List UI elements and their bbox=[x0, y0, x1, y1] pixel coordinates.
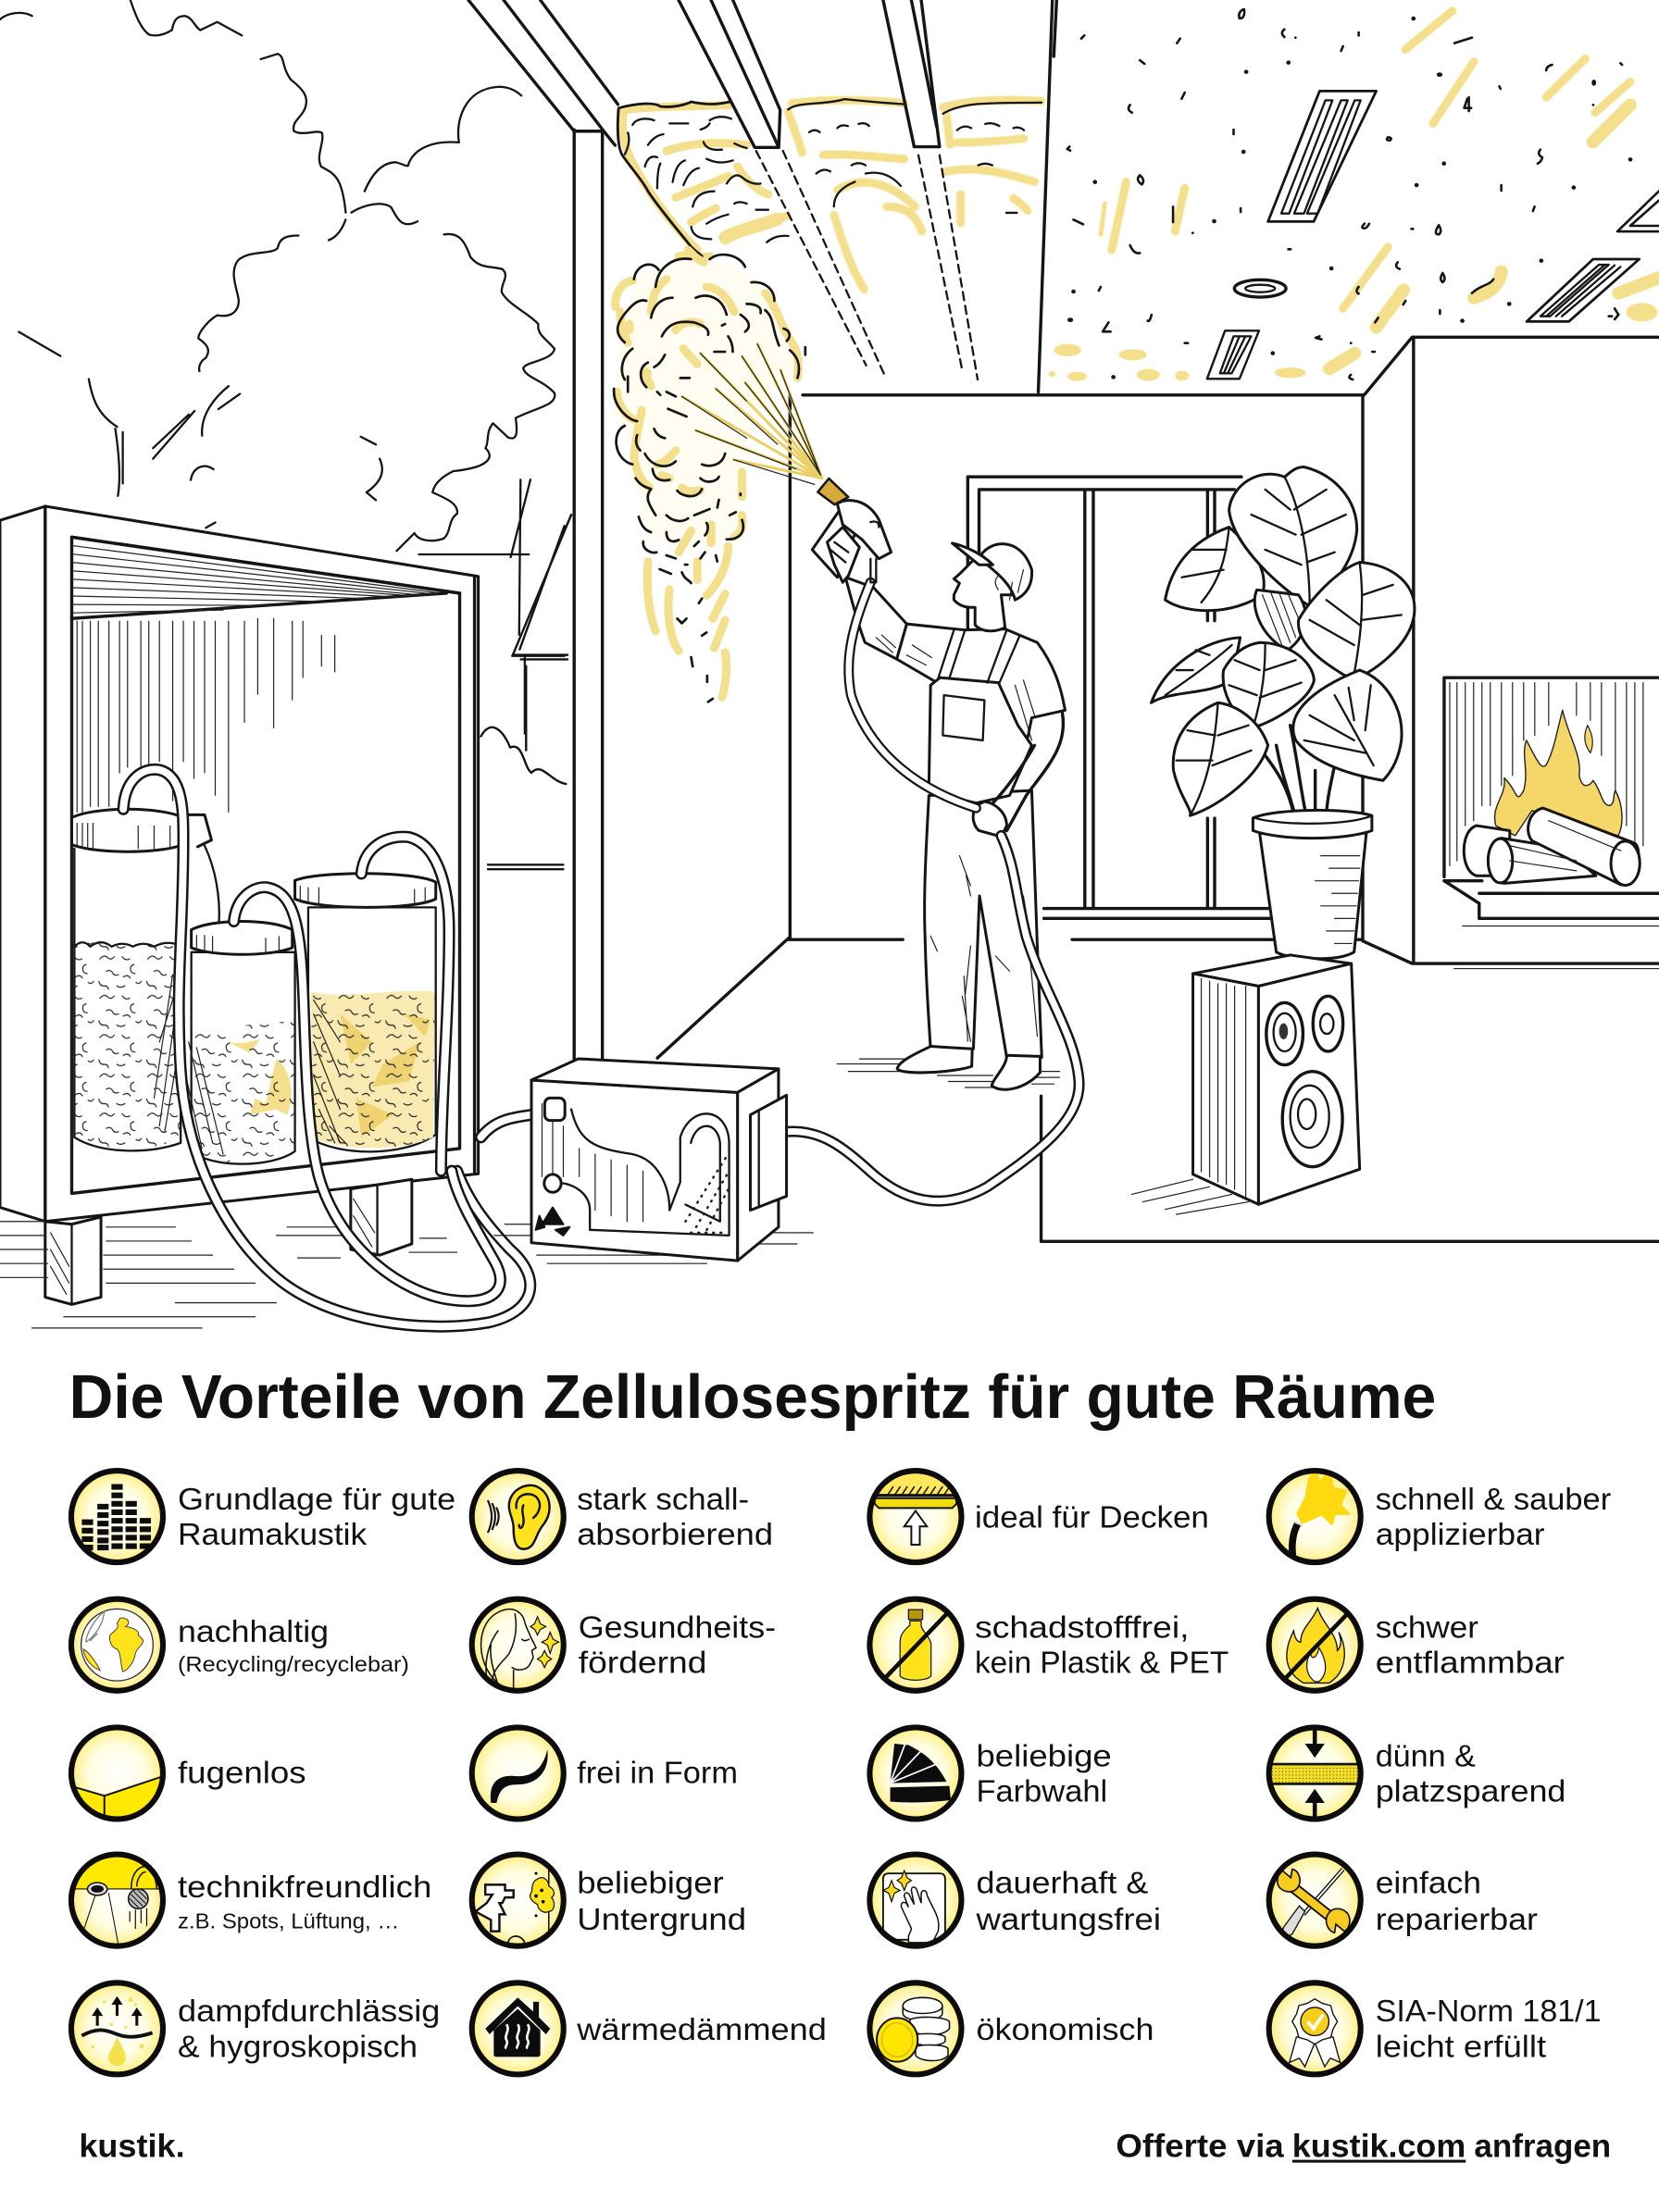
icon: certified medal bbox=[1269, 1982, 1361, 2074]
call to action bbox=[1116, 2129, 1611, 2165]
cabinet legs bbox=[0, 1179, 457, 1328]
brand logo: kustik. bbox=[79, 2129, 185, 2165]
hose bbox=[787, 836, 1079, 1201]
ceiling spotlight bbox=[1234, 280, 1286, 297]
cabinet with cellulose jars, hoses and machine bbox=[0, 506, 813, 1328]
background trees bbox=[0, 0, 555, 554]
jar: yellow cellulose bbox=[295, 874, 436, 1151]
label: reparierbar bbox=[1376, 1903, 1538, 1937]
label: fugenlos bbox=[178, 1757, 306, 1791]
icon: spot and vent bbox=[70, 1854, 164, 1946]
label: SIA-Norm 181/1 bbox=[1376, 1995, 1602, 2029]
benefit: schnell & sauber applizierbar bbox=[1269, 1471, 1611, 1562]
label: stark schall- bbox=[577, 1483, 749, 1517]
label: dampfdurchlässig bbox=[178, 1995, 440, 2029]
label bbox=[178, 1995, 440, 2064]
other foam panels on ceiling bbox=[788, 99, 1042, 290]
label: fördernd bbox=[579, 1647, 706, 1681]
icon: wrench and screwdriver bbox=[1269, 1855, 1361, 1946]
label: dauerhaft & bbox=[976, 1867, 1148, 1901]
label: nachhaltig bbox=[178, 1615, 329, 1649]
spray lines bbox=[682, 344, 822, 478]
icon: globe bbox=[71, 1599, 163, 1691]
ventilation grilles bbox=[1207, 91, 1659, 379]
label: z.B. Spots, Lüftung, … bbox=[178, 1909, 399, 1933]
spray foam cloud and spray jet bbox=[614, 250, 822, 702]
benefit: fugenlos bbox=[70, 1727, 306, 1820]
bib overall bbox=[929, 677, 1031, 803]
label: wartungsfrei bbox=[975, 1903, 1161, 1937]
icon: spray splash bbox=[1269, 1471, 1361, 1562]
blower machine bbox=[494, 1059, 813, 1263]
benefit: beliebige Farbwahl bbox=[869, 1727, 1112, 1820]
foam outline curls bbox=[614, 255, 805, 702]
worker with spray gun and hose bbox=[787, 478, 1079, 1201]
label: ökonomisch bbox=[976, 2013, 1154, 2047]
label: technikfreundlich bbox=[178, 1870, 431, 1905]
label: Farbwahl bbox=[976, 1774, 1107, 1808]
label: leicht erfüllt bbox=[1376, 2030, 1547, 2064]
ceiling beams bbox=[468, 0, 978, 379]
legs bbox=[925, 790, 1042, 1057]
benefit: wärmedämmend bbox=[472, 1982, 827, 2074]
loudspeaker bbox=[1132, 955, 1360, 1214]
label: entflammbar bbox=[1376, 1647, 1565, 1681]
label: & hygroskopisch bbox=[178, 2030, 418, 2064]
benefit: stark schallabsorbierend bbox=[472, 1471, 773, 1562]
label bbox=[976, 1739, 1112, 1808]
lower arm holding hose bbox=[992, 713, 1064, 830]
ceiling edges bbox=[803, 0, 1659, 395]
yellow foam tint bbox=[614, 250, 798, 697]
icon: seamless corner bbox=[70, 1727, 164, 1820]
label: beliebige bbox=[976, 1739, 1112, 1773]
benefit: schwer entflammbar bbox=[1269, 1599, 1565, 1691]
label: kein Plastik & PET bbox=[975, 1647, 1229, 1681]
label bbox=[1376, 1995, 1602, 2064]
yellow foam flecks bbox=[1048, 11, 1659, 381]
label: Untergrund bbox=[577, 1903, 746, 1937]
label bbox=[975, 1611, 1229, 1681]
benefit: ökonomisch bbox=[869, 1982, 1154, 2074]
benefits grid bbox=[70, 1470, 1611, 2074]
benefit: Grundlage für gute Raumakustik bbox=[71, 1471, 455, 1562]
label bbox=[975, 1867, 1161, 1937]
benefit: dauerhaft & wartungsfrei bbox=[869, 1855, 1161, 1946]
benefit: beliebiger Untergrund bbox=[472, 1854, 746, 1946]
jar: white cellulose bbox=[71, 809, 219, 1150]
benefit: nachhaltig bbox=[71, 1599, 409, 1691]
benefit: dampfdurchlässig & hygroskopisch bbox=[71, 1982, 440, 2074]
black specks bbox=[1067, 9, 1622, 379]
fireplace with logs and flames bbox=[1444, 677, 1659, 969]
label: Gesundheits- bbox=[579, 1611, 776, 1646]
hoses from jars to machine bbox=[123, 769, 531, 1326]
shirt and raised arm bbox=[897, 624, 1065, 745]
cabinet frame bbox=[0, 506, 479, 1222]
icon: heated house bbox=[472, 1982, 564, 2074]
label: absorbierend bbox=[577, 1518, 773, 1552]
icon: compressed layer bbox=[1268, 1727, 1361, 1820]
icon: vapour arrows and drop bbox=[71, 1982, 163, 2074]
label: Grundlage für gute bbox=[178, 1483, 455, 1517]
illustration: worker spraying cellulose in a room bbox=[0, 0, 1659, 1328]
icon: ceiling arrow bbox=[869, 1470, 962, 1562]
icon: face with stars bbox=[472, 1599, 564, 1691]
benefit: dünn & platzsparend bbox=[1268, 1727, 1565, 1820]
label bbox=[577, 1483, 773, 1552]
house and shrub behind cabinet bbox=[480, 515, 571, 869]
label: platzsparend bbox=[1376, 1774, 1565, 1808]
label bbox=[178, 1615, 409, 1676]
label: schadstofffrei, bbox=[975, 1611, 1190, 1646]
spray gun bbox=[817, 478, 848, 504]
call to action: Offerte via bbox=[1116, 2129, 1284, 2165]
label bbox=[1376, 1483, 1611, 1552]
benefit: ideal für Decken bbox=[869, 1470, 1209, 1562]
label: frei in Form bbox=[577, 1757, 738, 1791]
icon: free curve bbox=[472, 1727, 564, 1820]
call to action: kustik.com bbox=[1292, 2129, 1466, 2165]
icon: ear bbox=[472, 1471, 564, 1562]
label bbox=[1376, 1611, 1565, 1681]
finished ceiling with foam specks bbox=[1048, 9, 1659, 381]
label bbox=[579, 1611, 776, 1681]
call to action: anfragen bbox=[1474, 2129, 1611, 2165]
first foam panel on ceiling bbox=[617, 102, 789, 257]
label bbox=[1376, 1739, 1565, 1808]
title: Die Vorteile von Zellulosespritz für gute Räume bbox=[69, 1362, 1436, 1432]
label: applizierbar bbox=[1376, 1518, 1545, 1552]
head and cap bbox=[954, 559, 1015, 631]
label: (Recycling/recyclebar) bbox=[178, 1652, 409, 1676]
benefit: einfach reparierbar bbox=[1269, 1855, 1538, 1946]
label: ideal für Decken bbox=[975, 1501, 1209, 1535]
room walls, window and floor lines bbox=[511, 130, 1659, 1241]
label: wärmedämmend bbox=[576, 2013, 827, 2047]
icon: colour fan bbox=[869, 1727, 961, 1820]
icon: hand wiping surface bbox=[869, 1855, 961, 1946]
icon: spray gun on surface bbox=[472, 1854, 564, 1946]
label: einfach bbox=[1376, 1867, 1481, 1901]
label bbox=[577, 1867, 746, 1937]
benefit: frei in Form bbox=[472, 1727, 738, 1820]
label: dünn & bbox=[1376, 1739, 1476, 1773]
label: beliebiger bbox=[577, 1867, 724, 1901]
jar: partly yellow cellulose bbox=[183, 922, 295, 1164]
icon: crossed-out bottle bbox=[869, 1599, 961, 1691]
label bbox=[1376, 1867, 1538, 1937]
potted plant bbox=[1152, 467, 1415, 959]
floor shading below worker bbox=[837, 1059, 1059, 1087]
benefit: SIA-Norm 181/1 leicht erfüllt bbox=[1269, 1982, 1602, 2074]
label: schnell & sauber bbox=[1376, 1483, 1611, 1517]
icon: equalizer bbox=[71, 1471, 163, 1562]
icon: coin stack bbox=[869, 1982, 961, 2074]
benefit: technikfreundlich bbox=[70, 1854, 431, 1946]
icon: crossed-out flame bbox=[1269, 1599, 1361, 1691]
label bbox=[178, 1483, 455, 1552]
label bbox=[178, 1870, 431, 1933]
benefit: Gesundheitsfördernd bbox=[472, 1599, 776, 1691]
shoes bbox=[897, 1047, 972, 1073]
label: Raumakustik bbox=[178, 1518, 367, 1552]
benefit: schadstofffrei bbox=[869, 1599, 1229, 1691]
label: schwer bbox=[1376, 1611, 1478, 1646]
